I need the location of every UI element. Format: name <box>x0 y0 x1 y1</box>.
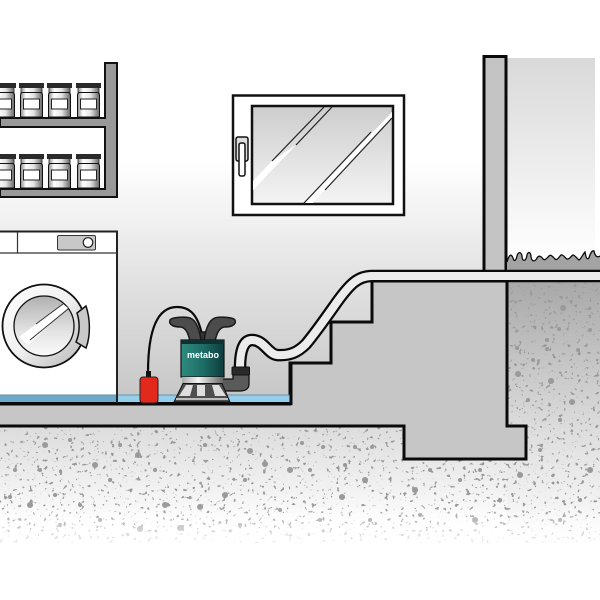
pump handles <box>170 317 235 341</box>
pump logo: metabo <box>187 350 220 360</box>
water on floor <box>0 363 291 404</box>
pump discharge elbow <box>222 367 250 391</box>
washer door handle <box>76 306 89 348</box>
window handle <box>236 137 248 176</box>
shelf unit <box>0 63 117 197</box>
pump base <box>174 384 230 402</box>
pump body <box>181 340 224 377</box>
washing machine <box>0 232 117 403</box>
washer door <box>2 284 86 368</box>
concrete foundation and stairs <box>0 281 526 459</box>
wall column <box>484 56 506 272</box>
grass <box>507 251 600 271</box>
hose <box>240 276 600 368</box>
wall background <box>0 0 483 403</box>
ground with speckles <box>0 281 600 546</box>
window <box>233 96 404 215</box>
washer display <box>58 236 96 250</box>
float switch <box>140 371 158 403</box>
jars lower row <box>0 154 101 188</box>
submersible pump <box>170 317 250 402</box>
garden view outside <box>507 58 595 263</box>
jars upper row <box>0 83 101 117</box>
power cable <box>148 307 202 373</box>
pump collar <box>182 377 223 384</box>
